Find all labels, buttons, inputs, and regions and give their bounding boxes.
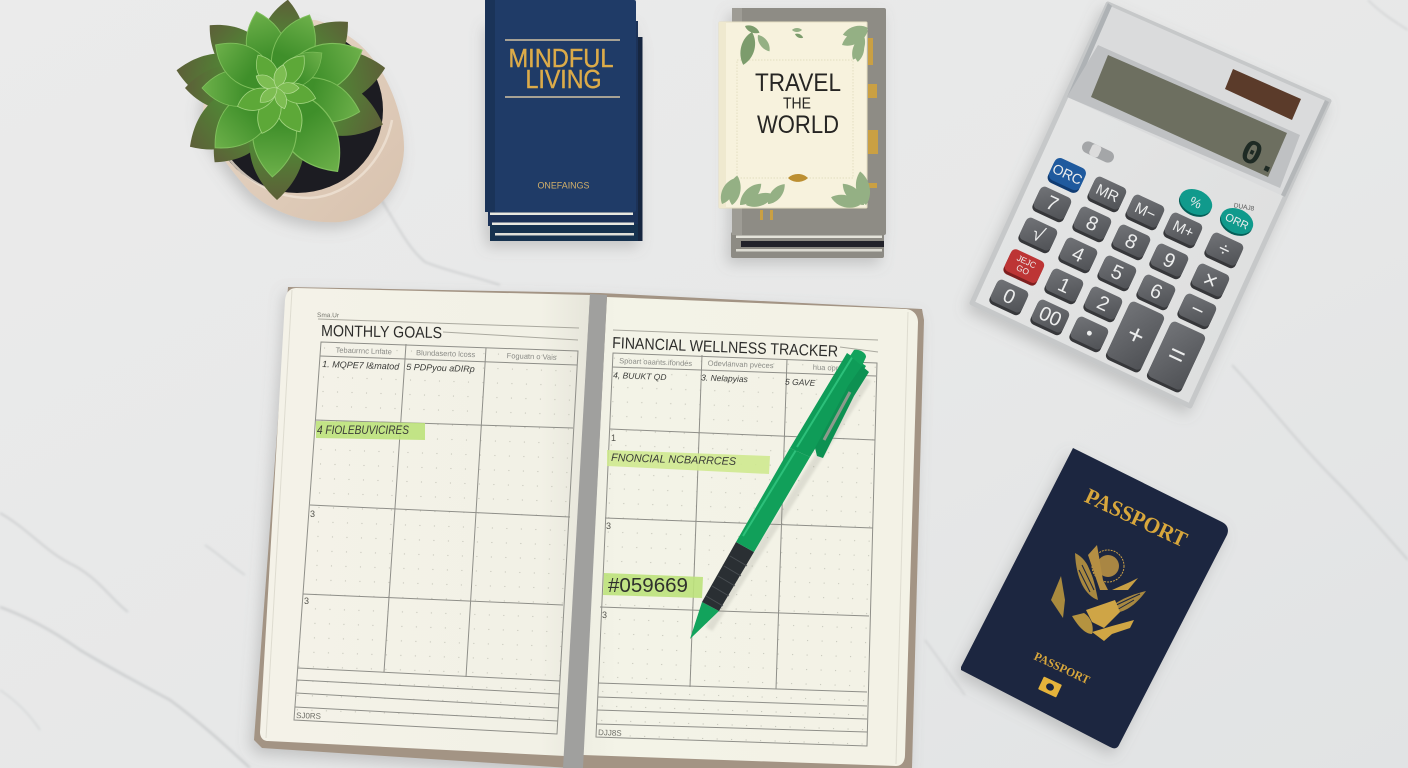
teal keys: % [1187, 193, 1205, 212]
left page small label: Sma.Ur [317, 312, 340, 319]
keypad: √ [1028, 223, 1048, 247]
biometric chip symbol [1038, 676, 1062, 698]
left page table text: Tebaurrnc Lnfate [335, 345, 392, 356]
pen clip [815, 366, 869, 458]
highlighted note: 4 FIOLEBUVICIRES [317, 425, 409, 437]
book title [755, 69, 841, 139]
row numbers [304, 509, 315, 606]
memory keys: MR [1093, 181, 1122, 206]
small passport label: PASSPORT [1032, 649, 1092, 687]
keypad: × [1198, 265, 1222, 296]
keypad: ÷ [1214, 238, 1234, 262]
row numbers [602, 433, 616, 620]
cream cover [719, 22, 867, 208]
keypad: 1 [1054, 274, 1074, 298]
green pen [690, 350, 869, 639]
highlighted note [607, 450, 770, 474]
open notebook [254, 287, 924, 768]
calculator body [972, 4, 1329, 406]
left page footer label: SJ0RS [296, 711, 321, 721]
number keys [1031, 185, 1073, 224]
right page table text [613, 355, 839, 389]
power switch [1080, 139, 1116, 165]
foliage decoration [717, 23, 873, 211]
book author line: ONEFAINGS [538, 180, 590, 192]
small key caption: DUAJ8 [1233, 202, 1255, 213]
monthly goals heading: MONTHLY GOALS [321, 323, 442, 342]
memory keys [1086, 175, 1128, 214]
passport [961, 448, 1228, 748]
tall equals key: = [1163, 337, 1191, 372]
row numbers: 1 [611, 433, 616, 443]
gold spine marks [760, 38, 878, 220]
keypad: 2 [1093, 292, 1113, 316]
tall plus key: + [1122, 317, 1150, 352]
pen tip [690, 602, 719, 639]
keypad: 8 [1121, 230, 1141, 254]
row numbers: 3 [606, 521, 611, 531]
tall equals key [1145, 320, 1207, 394]
right page footer label: DJJ8S [598, 728, 622, 738]
right page table text: 3. Nelapyias [701, 372, 749, 384]
lcd display [1091, 55, 1287, 185]
solar panel [1225, 69, 1301, 120]
keypad: 8 [1082, 212, 1102, 236]
left page table text: Foguatn o Vais [507, 351, 557, 362]
lower books in the stack [488, 21, 642, 241]
right page table text: Odevlanvan pveces [708, 359, 774, 370]
book title: THE [783, 96, 811, 112]
keypad: • [1082, 323, 1097, 343]
left page [260, 288, 590, 756]
row numbers: 3 [310, 509, 315, 519]
red key: JEJC [1015, 253, 1038, 270]
red key: GO [1015, 262, 1031, 277]
keypad: 9 [1159, 249, 1179, 273]
keypad: 00 [1035, 302, 1065, 332]
right page table text: 5 GAVE [785, 377, 816, 388]
book title: TRAVEL [755, 69, 841, 97]
lcd display: 0. [1233, 134, 1286, 185]
eagle emblem [1051, 545, 1146, 641]
book title: MINDFUL [508, 43, 614, 73]
right page table text: Spoart oaants.ifondes [619, 356, 693, 368]
highlighted code: #059669 [608, 575, 688, 597]
ribbon bookmark [563, 294, 607, 768]
right page [583, 297, 918, 766]
book title [508, 43, 614, 94]
rubber grip [702, 542, 754, 611]
clear key [1046, 156, 1088, 195]
keypad: M+ [1170, 217, 1197, 242]
succulent plant in pot [172, 0, 404, 222]
pen barrel [736, 448, 810, 552]
keypad: 5 [1107, 261, 1127, 285]
keypad: − [1187, 296, 1209, 324]
financial wellness tracker heading: FINANCIAL WELLNESS TRACKER [612, 335, 838, 361]
display bezel [1067, 45, 1300, 188]
notebook cover [254, 287, 924, 768]
left page table text [322, 345, 557, 377]
grey and cream book stack: Travel the World [717, 8, 886, 258]
red key [1002, 248, 1046, 287]
navy book stack: Mindful Living [485, 0, 642, 241]
keypad: M− [1132, 199, 1159, 224]
teal keys [1175, 184, 1216, 222]
keypad: 6 [1146, 280, 1166, 304]
book title: WORLD [757, 111, 839, 139]
number keys: 7 [1042, 192, 1062, 216]
keypad [988, 156, 1257, 394]
left page table text: Blundaserto lcoss [416, 348, 476, 359]
terracotta pot [203, 20, 404, 222]
keypad: ORR [1223, 211, 1250, 233]
book title: LIVING [526, 64, 602, 94]
keypad: 4 [1068, 243, 1088, 267]
row numbers: 3 [602, 610, 607, 620]
left page table text: 1. MQPE7 l&matod [322, 359, 400, 372]
navy cover [485, 0, 636, 212]
highlighted code [603, 573, 703, 598]
calculator [972, 3, 1329, 406]
right page table text: 4, BUUKT QD [613, 370, 667, 382]
right page table text: hua opr [813, 363, 839, 373]
highlighted note [316, 421, 425, 440]
pen cap end [850, 350, 866, 366]
passport cover [961, 448, 1228, 748]
highlighted note: FNONCIAL NCBARRCES [611, 452, 737, 468]
passport title: PASSPORT [1081, 483, 1192, 552]
keypad: 0 [999, 285, 1019, 309]
left page table text: 5 PDPyou aDIRp [406, 362, 475, 374]
clear key: ORC [1050, 160, 1085, 188]
succulent leaves [172, 0, 392, 200]
tall plus key [1104, 300, 1166, 374]
row numbers: 3 [304, 596, 309, 606]
grey hardcover stack [731, 8, 886, 258]
